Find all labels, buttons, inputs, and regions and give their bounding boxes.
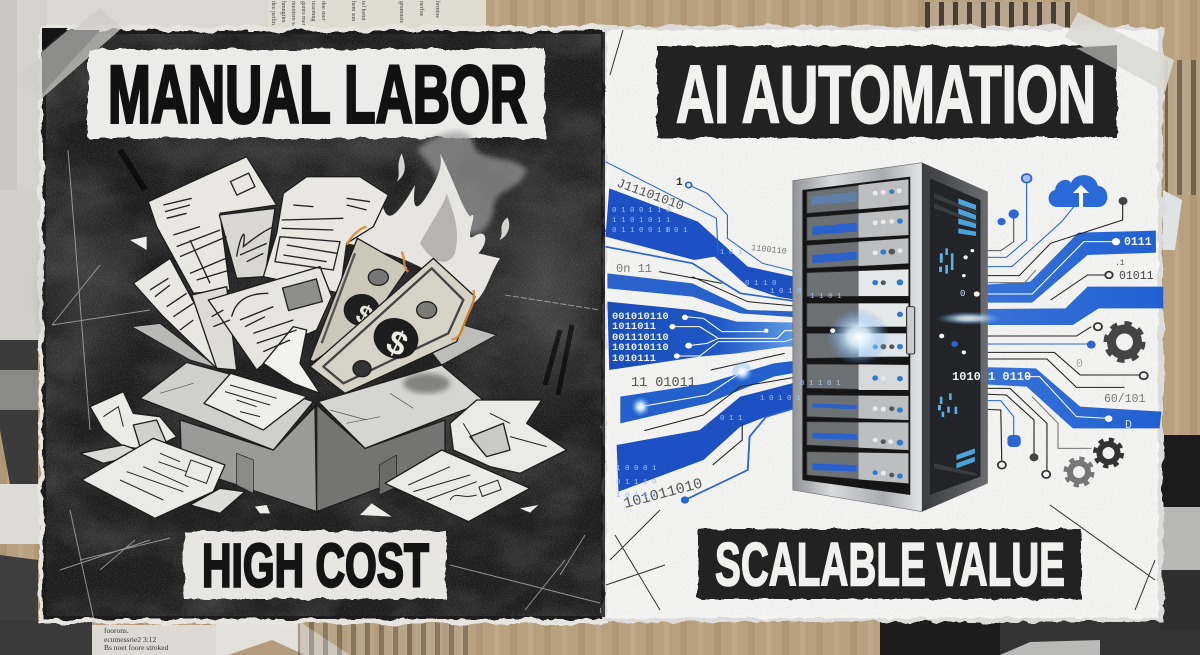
loose note on flap xyxy=(204,373,307,430)
illustration: data ribbons and server rack xyxy=(606,162,1163,512)
binary digits: left stream: 1100110 xyxy=(751,243,787,257)
background: cardboard and torn newspaper collage: deu petlin xyxy=(270,1,276,25)
binary digits: left stream: 0 1 1 1 0 xyxy=(616,479,657,487)
binary digits: left stream: 001110110 xyxy=(612,332,669,344)
background: cardboard and torn newspaper collage: gramnete xyxy=(398,1,404,24)
background: cardboard and torn newspaper collage: tusemng xyxy=(310,1,316,21)
binary digits: left stream: 001010110 xyxy=(612,311,669,323)
crumpled and scattered papers xyxy=(80,392,567,522)
binary digits: left stream xyxy=(612,176,842,513)
box body xyxy=(140,362,485,512)
binary digits: left stream: 1 0 1 0 1 xyxy=(760,395,801,403)
heading strip: HIGH COST: HIGH COST xyxy=(202,532,429,600)
heading strip: HIGH COST xyxy=(184,531,446,600)
tape: top-right corner xyxy=(1065,12,1174,92)
binary digits: left stream: 1011011 xyxy=(612,321,656,333)
binary digits: left stream: 101011010 xyxy=(622,475,705,513)
circuit traces xyxy=(606,162,1143,500)
circuit nodes xyxy=(669,174,1148,504)
panel: ai automation (light) xyxy=(601,26,1163,622)
binary digits: left stream: 1 0 1 0 xyxy=(770,288,802,296)
binary digits: left stream: 1 1 0 1 0 1 1 xyxy=(612,217,671,225)
binary digits: left stream: 1 xyxy=(676,177,683,189)
server rack xyxy=(793,163,988,512)
icon: gear large xyxy=(1106,324,1142,360)
background: cardboard and torn newspaper collage: tel hemt xyxy=(360,1,366,21)
flames xyxy=(347,153,500,303)
newspaper fragment text: foorons. xyxy=(104,626,129,635)
binary digits: right stream: 0 xyxy=(960,289,965,299)
side vents and lights xyxy=(956,198,976,468)
heading strip: MANUAL LABOR: MANUAL LABOR xyxy=(108,50,527,140)
background: cardboard and torn newspaper collage: doe mer xyxy=(320,1,326,20)
binary digits: left stream: 1 0 0 0 1 xyxy=(616,465,657,473)
binary digits: left stream: 0n 11 xyxy=(616,262,652,276)
back box flaps xyxy=(132,323,497,368)
binary digits: right stream: 0111 xyxy=(1124,236,1152,249)
binary digits: left stream: 101010110 xyxy=(612,342,669,354)
binary digits: right stream: 01011 xyxy=(1119,270,1154,283)
icon: cloud upload xyxy=(1049,175,1107,207)
binary digits: right stream: .1 xyxy=(1115,259,1125,268)
binary digits: left stream: 0 1 1 0 1 xyxy=(800,380,841,388)
panel: manual labor (dark) xyxy=(30,26,615,625)
binary digits: left stream: 11 01011 xyxy=(631,376,696,391)
icon: gear small xyxy=(1066,459,1092,485)
newspaper fragment text: ecumessrie2 3:12 xyxy=(104,635,157,644)
binary digits: right stream: 1010 1 0110 xyxy=(952,370,1031,384)
money bill back xyxy=(310,238,408,362)
newspaper fragment text xyxy=(104,626,169,652)
binary digits: left stream: 1010111 xyxy=(612,353,656,365)
background: cardboard and torn newspaper collage: muntem se xyxy=(290,1,296,27)
heading strip: MANUAL LABOR xyxy=(88,49,545,140)
energy glow at rack xyxy=(827,308,890,365)
binary digits: left stream: J11101010 xyxy=(615,176,686,214)
newspaper fragment text: Bs noet foore stroked xyxy=(104,643,169,652)
binary digits: left stream: 0 1 1 0 xyxy=(745,280,777,288)
tape: top-left corner xyxy=(17,8,122,100)
binary digits: right stream: 60/101 xyxy=(1104,393,1146,406)
binary digits: left stream: 1 0 1 xyxy=(665,227,688,235)
money bill front: $ xyxy=(381,323,413,365)
background: cardboard and torn newspaper collage: hrmtoe xyxy=(434,1,440,18)
left data ribbons xyxy=(606,188,857,492)
binary digits: right stream xyxy=(952,236,1154,432)
binary digits: left stream: 1 0 1 xyxy=(720,249,743,257)
smoke xyxy=(417,132,527,234)
binary digits: left stream: 1 1 0 1 xyxy=(810,293,842,301)
illustration: box of paperwork and burning money xyxy=(80,132,567,522)
binary digits: right stream: D xyxy=(1125,419,1132,432)
burn marks xyxy=(347,227,474,340)
binary digits: left stream: 0 1 1 xyxy=(720,415,743,423)
background: cardboard and torn newspaper collage: nerfoe xyxy=(418,1,425,17)
icon: gear medium xyxy=(1096,440,1122,466)
background: cardboard and torn newspaper collage: gunto mer xyxy=(300,1,306,26)
money bill back: $ xyxy=(351,298,378,332)
money bill front xyxy=(310,258,475,393)
background: cardboard and torn newspaper collage: hmngtim xyxy=(280,1,286,23)
binary digits: left stream: 1 0 1 0 1 xyxy=(616,492,657,500)
binary digits: left stream: 0 1 0 0 1 1 0 xyxy=(612,207,671,215)
paper stack xyxy=(133,157,388,393)
binary digits: left stream: 0 1 1 0 0 1 0 xyxy=(612,227,671,235)
binary digits: right stream: 0 xyxy=(1076,358,1083,371)
rack handle xyxy=(907,307,915,354)
background: cardboard and torn newspaper collage: hem son xyxy=(350,1,356,21)
right data ribbons xyxy=(931,231,1163,428)
